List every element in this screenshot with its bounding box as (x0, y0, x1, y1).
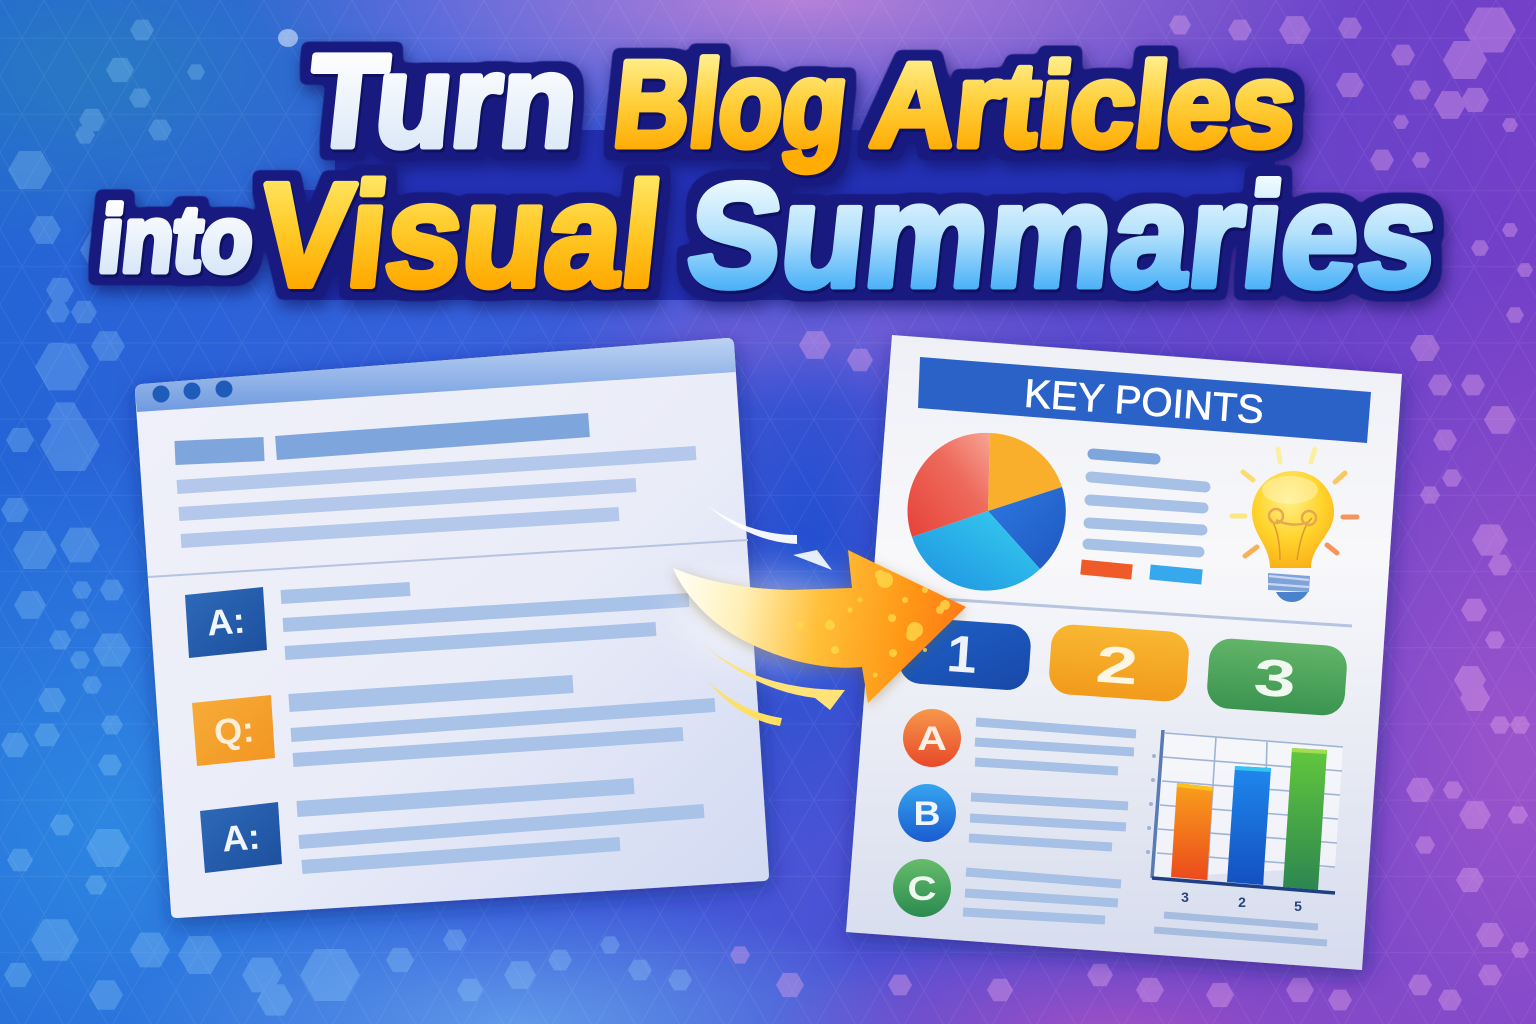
list badge A: A (917, 720, 947, 758)
question badge Q (192, 695, 275, 766)
question badge Q: Q: (212, 708, 256, 753)
answer badge A (200, 802, 282, 873)
step pill 3 (1206, 637, 1348, 717)
step pill 3: 3 (1252, 649, 1298, 709)
red and blue tags (1081, 567, 1202, 577)
title word: Articles: Articles (866, 39, 1303, 172)
article heading bars (175, 425, 589, 453)
list text C (963, 872, 1121, 920)
title word: Summaries: Summaries (681, 154, 1445, 318)
list text A (975, 722, 1136, 771)
list badge A (903, 709, 961, 767)
title word: into: into (94, 187, 258, 291)
article intro text lines (177, 453, 696, 541)
title (94, 27, 1445, 318)
bar chart: 5 (1294, 898, 1302, 914)
list badge C: C (908, 870, 936, 908)
arrow: article to summary (673, 550, 966, 703)
title backing plate (300, 130, 1275, 300)
title word: Blog: Blog (608, 35, 854, 172)
page body (846, 335, 1402, 970)
panel: blog article browser window (135, 338, 769, 918)
bar chart (1146, 730, 1343, 914)
answer badge A (185, 587, 267, 658)
answer text lines (297, 786, 704, 867)
step pill 1 (898, 617, 1032, 691)
pie chart (907, 433, 1066, 591)
answer badge A: A: (220, 815, 262, 860)
answer text lines (281, 589, 689, 653)
list badge B: B (914, 795, 940, 833)
bar chart: 2 (1238, 894, 1246, 910)
title word: Turn: Turn (302, 27, 585, 174)
title word: Visual: Visual (252, 154, 669, 317)
list badge B (898, 784, 956, 842)
step pill 2: 2 (1094, 636, 1140, 696)
arrow glow (680, 578, 860, 662)
icon: light bulb (1232, 449, 1357, 602)
decorative bokeh dot (278, 29, 298, 47)
answer badge A: A: (205, 599, 247, 644)
summary text lines (1088, 454, 1205, 552)
list text B (969, 797, 1128, 847)
KEY POINTS banner: KEY POINTS (1023, 372, 1265, 432)
KEY POINTS banner (918, 357, 1371, 443)
bar chart: 3 (1181, 889, 1189, 905)
question text lines (289, 684, 715, 760)
list badge C (893, 859, 951, 917)
window title bar (135, 338, 736, 412)
window control dots (152, 380, 232, 402)
panel: visual summary page (846, 335, 1402, 970)
speed lines (697, 506, 845, 726)
step pill 1: 1 (945, 625, 979, 685)
window body (135, 338, 769, 918)
step pill 2 (1048, 623, 1190, 703)
chart caption lines (1154, 915, 1327, 943)
